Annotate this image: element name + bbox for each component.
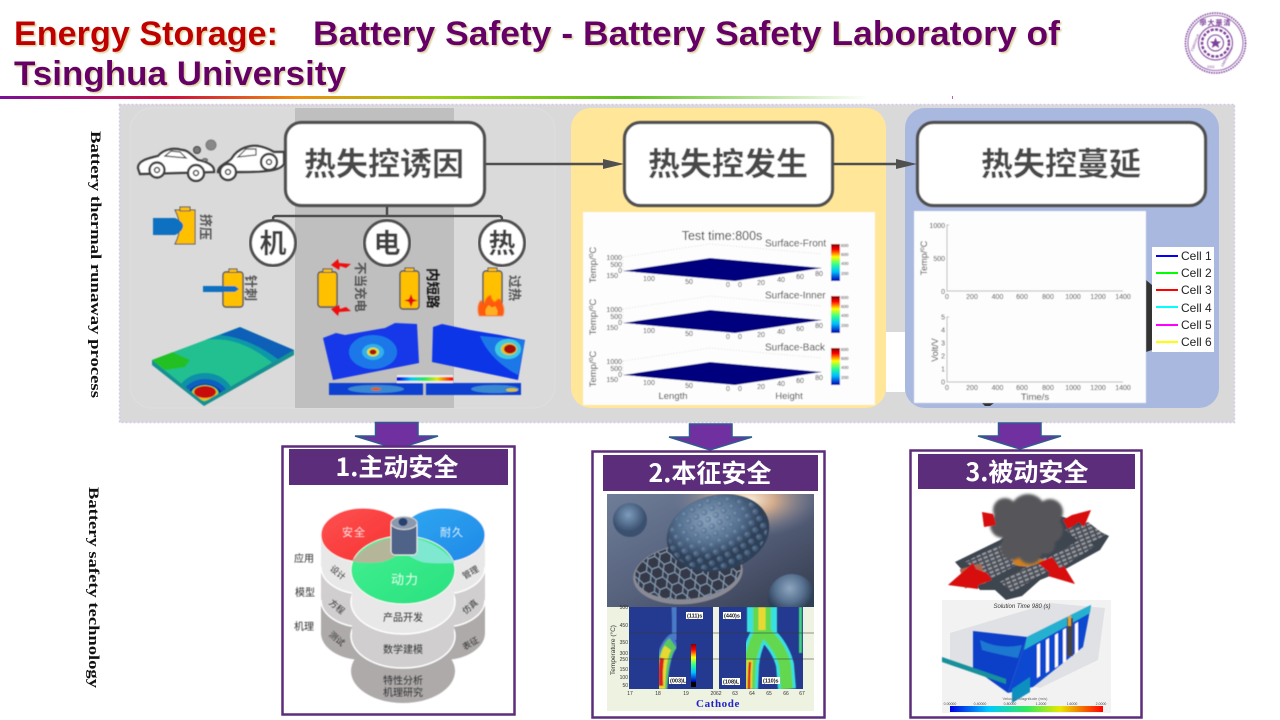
legend: cells: Cell 1 xyxy=(1181,249,1212,263)
plot: surface inner xyxy=(588,290,849,341)
plot: surface front: 40 xyxy=(777,277,785,284)
arrow: down to panel 3 xyxy=(978,423,1061,449)
title: Battery Safety - Battery Safety Laboratory of xyxy=(313,15,1061,53)
box: 热失控诱因 xyxy=(286,122,484,206)
side label: safety technology: Battery safety technology xyxy=(85,487,101,689)
plot: surface front: 150 xyxy=(606,273,618,280)
plot: surface back: 600 xyxy=(841,356,849,361)
title xyxy=(14,15,1061,93)
chart: in situ XRD heatmap: 250 xyxy=(620,657,628,663)
legend: cells: Cell 5 xyxy=(1181,318,1212,332)
heading: 3.被动安全 xyxy=(918,453,1135,489)
plot: surface front: 1000 xyxy=(606,255,622,262)
plot: surface inner: 600 xyxy=(841,295,849,300)
plot: surface back: 400 xyxy=(841,365,849,370)
stack labels: 耐久 xyxy=(440,526,464,539)
plot: surface inner: 60 xyxy=(796,326,804,333)
plot: surface back: Temp/⁰C xyxy=(588,351,599,387)
title: Energy Storage: xyxy=(14,15,278,53)
image: CFD simulation xyxy=(942,600,1111,713)
plot: surface back: 0 xyxy=(726,386,730,393)
chart: in situ XRD heatmap: 67 xyxy=(799,691,805,697)
axes: temperature: 0 xyxy=(945,294,949,301)
axes: temperature: 1400 xyxy=(1115,294,1131,301)
smoke cloud xyxy=(990,494,1063,564)
layer: bottom xyxy=(321,590,485,703)
panel: triggers xyxy=(130,108,555,408)
plot: surface inner: 1000 xyxy=(606,307,622,314)
icon: overheat battery: 过热 xyxy=(506,275,525,301)
chart: in situ XRD heatmap: Temperature (°C) xyxy=(609,625,617,675)
chart: in situ XRD heatmap: 100 xyxy=(620,675,628,681)
connector arrows xyxy=(485,159,917,169)
panel: intrinsic safety xyxy=(592,452,824,718)
image: battery pack with smoke xyxy=(948,494,1109,600)
circle: 机 xyxy=(250,220,296,266)
plot: surface inner: 100 xyxy=(643,328,655,335)
legend: cells: Cell 6 xyxy=(1181,335,1212,349)
axes: voltage: 1000 xyxy=(1065,385,1081,392)
plot: surface inner: 400 xyxy=(841,313,849,318)
plot: surface back: Surface-Back xyxy=(765,342,826,354)
stack labels: 表征 xyxy=(461,635,481,652)
icon: crush battery xyxy=(153,207,216,244)
chart: in situ XRD heatmap: (003)L xyxy=(670,678,687,684)
axes: voltage: Time/s xyxy=(1021,392,1049,403)
circle: 热 xyxy=(480,220,524,266)
chart: in situ XRD heatmap: (110)s xyxy=(763,678,779,684)
plot: surface inner: 80 xyxy=(815,323,823,330)
legend: cells: Cell 3 xyxy=(1181,283,1212,297)
box: 热失控发生 xyxy=(624,122,832,206)
logo: Tsinghua University seal: TSINGHUA xyxy=(1190,33,1200,52)
chart: cell temperature and voltage xyxy=(914,211,1146,403)
layer: middle xyxy=(321,573,485,668)
stack labels xyxy=(294,525,481,699)
layer: top xyxy=(321,540,485,634)
chart: battery thermal maps xyxy=(323,323,525,395)
plot: surface back: 0 xyxy=(618,372,622,379)
stack labels: 特性分析 xyxy=(383,674,423,687)
plot: surface inner: 500 xyxy=(610,314,622,321)
axes: voltage: 1400 xyxy=(1115,385,1131,392)
chart: in situ XRD heatmap: 65 xyxy=(766,691,772,697)
plot: surface inner: Surface-Inner xyxy=(765,290,826,302)
icon: nail battery: 针刺 xyxy=(242,275,261,301)
plot: surface front: 500 xyxy=(610,262,622,269)
plot: surface inner: 40 xyxy=(777,329,785,336)
axes: temperature: 1000 xyxy=(929,223,945,230)
chart: in situ XRD heatmap: 350 xyxy=(620,640,628,646)
circle: 机: 机 xyxy=(260,222,286,261)
stack labels: 管理 xyxy=(461,564,481,581)
plot: surface back: 50 xyxy=(685,383,693,390)
logo: Tsinghua University seal: 學大華清 xyxy=(1200,18,1232,28)
circle: 电 xyxy=(364,220,410,266)
plot: surface front: 20 xyxy=(757,280,765,287)
panel: passive safety xyxy=(910,450,1142,718)
image: CFD simulation: 0.00000 xyxy=(944,702,956,706)
axes: temperature: 500 xyxy=(933,256,945,263)
plot: surface inner: 0 xyxy=(618,320,622,327)
plot: surface back: 20 xyxy=(757,384,765,391)
plot: surface back: 100 xyxy=(643,380,655,387)
overlap: blue and green xyxy=(403,537,455,563)
stack labels: 安全 xyxy=(342,525,366,539)
icon: internal short battery xyxy=(400,268,444,309)
box: 热失控发生: 热失控发生 xyxy=(648,139,808,185)
axes: voltage: 5 xyxy=(941,314,945,322)
plot: surface front: Temp/⁰C xyxy=(588,247,599,283)
disk: safety xyxy=(321,508,405,562)
plot: surface back: 200 xyxy=(841,375,849,380)
stack labels: 设计 xyxy=(328,563,348,582)
stack labels: 动力 xyxy=(391,572,419,587)
axes: temperature: 200 xyxy=(966,294,978,301)
title rule xyxy=(0,96,870,99)
chart: in situ XRD heatmap xyxy=(607,605,814,711)
logo: Tsinghua University seal: UNIVERSITY xyxy=(1220,46,1234,67)
disk: power xyxy=(351,536,455,604)
chart: in situ XRD heatmap: 19 xyxy=(683,691,689,697)
stack labels: 机理研究 xyxy=(383,686,423,699)
chart: in situ XRD heatmap: (440)s xyxy=(724,614,740,620)
heading: 1.主动安全 xyxy=(289,448,508,485)
box: 热失控蔓延: 热失控蔓延 xyxy=(981,139,1141,185)
axes: voltage: 4 xyxy=(941,328,945,334)
chart: in situ XRD heatmap: 17 xyxy=(627,691,633,697)
chart: in situ XRD heatmap: 18 xyxy=(655,691,661,697)
plot: surface front: 600 xyxy=(841,243,849,248)
plot: surface back: 0 xyxy=(738,386,742,393)
icon: crush battery: 挤压 xyxy=(197,214,216,240)
axes: temperature: 600 xyxy=(1016,294,1028,301)
icon: car crash xyxy=(138,140,284,181)
plot: surface inner: 0 xyxy=(726,334,730,341)
circle: 热: 热 xyxy=(488,222,516,261)
plot: surface back: 600 xyxy=(841,347,849,352)
plot: surface inner: 0 xyxy=(738,334,742,341)
panel: propagation xyxy=(905,108,1219,408)
plot: surface front: Surface-Front xyxy=(765,238,826,250)
axes: voltage: 2 xyxy=(941,354,945,360)
stack labels: 模型 xyxy=(295,586,315,599)
stack labels: 测试 xyxy=(327,629,347,648)
plot: surface back: 150 xyxy=(606,377,618,384)
axes: voltage: 1 xyxy=(941,366,945,374)
plot: surface back: 500 xyxy=(610,366,622,373)
axes: voltage: 800 xyxy=(1042,385,1054,392)
overlap: red and green xyxy=(352,537,403,563)
image: CFD simulation: 2.0000 xyxy=(1096,702,1106,706)
chart: in situ XRD heatmap: (111)s xyxy=(687,614,702,620)
plot: surface front: 50 xyxy=(685,279,693,286)
chart: surface temperature plots: Length xyxy=(658,391,688,402)
plot: surface inner: 200 xyxy=(841,323,849,328)
title: Tsinghua University xyxy=(14,55,346,93)
axes: voltage: 3 xyxy=(941,340,945,348)
plot: surface front: 600 xyxy=(841,252,849,257)
heading: 2.本征安全 xyxy=(603,454,818,491)
image: CFD simulation: Velocity: Magnitude (m/s) xyxy=(1003,696,1048,701)
chart: in situ XRD heatmap: 2062 xyxy=(710,691,722,697)
icon: improper charging battery: 不当充电 xyxy=(352,262,371,313)
plot: surface back: 40 xyxy=(777,381,785,388)
chart: in situ XRD heatmap: 66 xyxy=(783,691,789,697)
icon: improper charging battery xyxy=(318,259,371,316)
axes: voltage: 400 xyxy=(992,385,1003,392)
plot: surface back xyxy=(588,342,849,393)
plot: surface inner: 50 xyxy=(685,331,693,338)
plot: surface back: 80 xyxy=(815,375,823,382)
axes: temperature: 0 xyxy=(941,289,945,296)
plot: surface front: 0 xyxy=(618,268,622,275)
image: CFD simulation: 0.80000 xyxy=(1004,702,1016,706)
axes: voltage: 600 xyxy=(1016,385,1028,392)
chart: in situ XRD heatmap: Cathode xyxy=(696,698,740,710)
side label: thermal runaway: Battery thermal runaway process xyxy=(87,131,103,398)
plot: surface back: 1000 xyxy=(606,359,622,366)
icon: nail battery xyxy=(203,269,261,307)
plot: surface inner: 20 xyxy=(757,332,765,339)
image: CFD simulation: 1.2000 xyxy=(1036,702,1046,706)
plot: surface front: 60 xyxy=(796,274,804,281)
axes: voltage: 1200 xyxy=(1090,385,1106,392)
white gap strip xyxy=(886,332,905,392)
legend: cells: Cell 4 xyxy=(1181,301,1212,315)
axes: temperature xyxy=(919,223,1131,301)
axes: voltage: 0 xyxy=(945,385,949,392)
stack labels: 产品开发 xyxy=(383,611,423,624)
tree connector xyxy=(273,206,502,226)
plot: surface front: 100 xyxy=(643,276,655,283)
plot: surface front: 400 xyxy=(841,261,849,266)
chart: in situ XRD heatmap: 64 xyxy=(749,691,755,697)
panel: occurrence xyxy=(571,108,886,408)
chart: in situ XRD heatmap: 450 xyxy=(620,623,628,629)
panel: thermal runaway process band xyxy=(120,104,1234,422)
arrow: down to panel 1 xyxy=(355,422,438,449)
disk: durability xyxy=(401,508,485,562)
arrow: down to panel 2 xyxy=(669,424,752,450)
axes: voltage: 0 xyxy=(941,380,945,386)
image: CFD simulation: 1.6000 xyxy=(1067,702,1077,706)
box: 热失控蔓延 xyxy=(918,122,1206,206)
axes: temperature: 1200 xyxy=(1090,294,1106,301)
chart: in situ XRD heatmap: 500 xyxy=(620,605,628,611)
plot: surface front: 200 xyxy=(841,271,849,276)
dark pack behind plots xyxy=(982,280,1152,406)
stack labels: 数学建模 xyxy=(383,643,423,656)
chart: surface temperature plots: Test time:800s xyxy=(682,229,762,243)
legend: cells: Cell 2 xyxy=(1181,266,1212,280)
logo: Tsinghua University seal xyxy=(1186,13,1246,73)
axes: voltage xyxy=(930,314,1131,403)
plot: surface inner: Temp/⁰C xyxy=(588,299,599,335)
image: CFD simulation: Solution Time 980 (s) xyxy=(994,604,1050,610)
chart: in situ XRD heatmap: (108)L xyxy=(723,680,740,686)
stack labels: 方程 xyxy=(327,597,347,616)
image: CFD simulation: 0.40000 xyxy=(974,702,986,706)
axes: temperature: Temp/⁰C xyxy=(919,240,929,275)
legend: cells xyxy=(1152,247,1214,352)
plot: surface front xyxy=(588,238,849,289)
logo: Tsinghua University seal: 1911 xyxy=(1207,65,1215,69)
panel: active safety xyxy=(282,446,514,714)
chart: in situ XRD heatmap: 150 xyxy=(620,667,628,673)
chart: in situ XRD heatmap: 63 xyxy=(732,691,738,697)
plot: surface back: 60 xyxy=(796,378,804,385)
chart: surface temperature plots: Height xyxy=(775,391,803,402)
image: cathode particle xyxy=(607,494,814,607)
heading: 1.主动安全: 1.主动安全 xyxy=(336,448,458,484)
axes: temperature: 400 xyxy=(992,294,1003,301)
chart: surface temperature plots xyxy=(583,212,875,405)
axes: voltage: 200 xyxy=(966,385,978,392)
icon: overheat battery xyxy=(478,268,525,316)
icon: internal short battery: 内短路 xyxy=(424,268,444,309)
heading: 2.本征安全: 2.本征安全 xyxy=(649,454,771,490)
plot: surface inner: 600 xyxy=(841,304,849,309)
chart: FEM plate xyxy=(151,326,295,406)
plot: surface front: 0 xyxy=(738,282,742,289)
chart: in situ XRD heatmap: 50 xyxy=(622,683,628,689)
box: 热失控诱因: 热失控诱因 xyxy=(304,139,464,185)
stack labels: 应用 xyxy=(294,552,314,565)
heading: 3.被动安全: 3.被动安全 xyxy=(966,453,1088,489)
axes: voltage: Volt/V xyxy=(930,338,940,362)
axes: temperature: 1000 xyxy=(1065,294,1081,301)
icon: cell xyxy=(391,516,417,555)
axes: temperature: 800 xyxy=(1042,294,1054,301)
plot: surface front: 80 xyxy=(815,271,823,278)
stack labels: 机理 xyxy=(294,620,314,633)
circle: 电: 电 xyxy=(374,222,400,261)
stack labels: 仿真 xyxy=(460,597,480,616)
diagram: layered stack xyxy=(321,508,485,703)
plot: surface front: 0 xyxy=(726,282,730,289)
chart: in situ XRD heatmap: 300 xyxy=(620,651,628,657)
plot: surface inner: 150 xyxy=(606,325,618,332)
